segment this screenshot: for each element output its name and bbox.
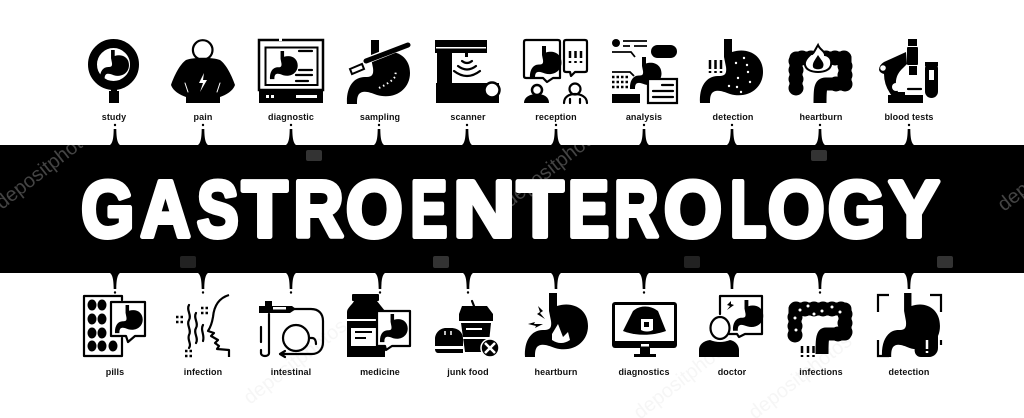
title band: [0, 145, 1024, 273]
bottom labels: junk food: [446, 367, 489, 377]
icon: analysis: [612, 39, 677, 103]
icon: heartburn stomach: [525, 293, 588, 357]
top labels: blood tests: [884, 112, 934, 122]
bottom labels: pills: [106, 367, 124, 377]
title text: G: [828, 165, 885, 254]
icon: diagnostic: [259, 38, 323, 103]
watermark on band: depositphotos: [500, 118, 611, 212]
icon: heartburn colon: [796, 45, 845, 103]
icon: detection frame: [878, 293, 941, 357]
icon: detection: [700, 39, 763, 103]
icon: infection: [176, 295, 229, 357]
title text: O: [346, 165, 403, 254]
top labels: sampling: [360, 112, 400, 122]
bottom labels: intestinal: [271, 367, 311, 377]
top labels: study: [102, 112, 126, 122]
bottom labels: infection: [184, 367, 222, 377]
bottom labels: [106, 367, 929, 377]
icon: junk food: [435, 301, 499, 357]
icon: pain: [171, 40, 235, 103]
title text: E: [410, 164, 447, 254]
icon: medicine: [347, 294, 410, 357]
bottom labels: doctor: [718, 367, 747, 377]
bottom labels: medicine: [360, 367, 400, 377]
icon: study: [92, 44, 134, 103]
title text: N: [453, 164, 515, 254]
title text: A: [140, 164, 190, 254]
title text: O: [768, 165, 825, 254]
top connectors: [105, 124, 919, 147]
title text: O: [664, 165, 722, 254]
icon: pills: [84, 296, 145, 356]
title text: [81, 164, 939, 254]
top labels: analysis: [626, 112, 662, 122]
bottom labels: heartburn: [535, 367, 577, 377]
icon: blood tests: [879, 39, 938, 103]
top labels: diagnostic: [268, 112, 314, 122]
bottom labels: diagnostics: [618, 367, 670, 377]
bottom labels: infections: [799, 367, 843, 377]
top labels: detection: [713, 112, 753, 122]
faint watermark on white: depositphotos: [240, 315, 351, 409]
top labels: pain: [194, 112, 212, 122]
title text: L: [730, 164, 766, 254]
title text: E: [568, 165, 609, 254]
icon: sampling: [347, 40, 410, 104]
title text: G: [81, 164, 134, 254]
watermark on band: [0, 145, 1024, 268]
icon: scanner: [435, 40, 500, 103]
title text: Y: [889, 164, 939, 254]
title text: R: [294, 164, 343, 254]
title text: R: [614, 165, 658, 254]
icon: intestinal: [259, 301, 323, 357]
title text: T: [242, 165, 287, 254]
bottom labels: detection: [889, 367, 929, 377]
icon: doctor: [699, 296, 763, 357]
title text: S: [197, 165, 239, 254]
icon: infections colon: [794, 304, 845, 357]
faint watermark on white: [240, 315, 856, 418]
bottom connectors: [105, 271, 919, 294]
top labels: heartburn: [800, 112, 842, 122]
icon: reception: [524, 40, 587, 103]
icon: diagnostics monitor: [612, 302, 677, 357]
top labels: reception: [535, 112, 577, 122]
title text: T: [517, 164, 563, 254]
top labels: scanner: [450, 112, 486, 122]
top labels: [102, 112, 934, 122]
